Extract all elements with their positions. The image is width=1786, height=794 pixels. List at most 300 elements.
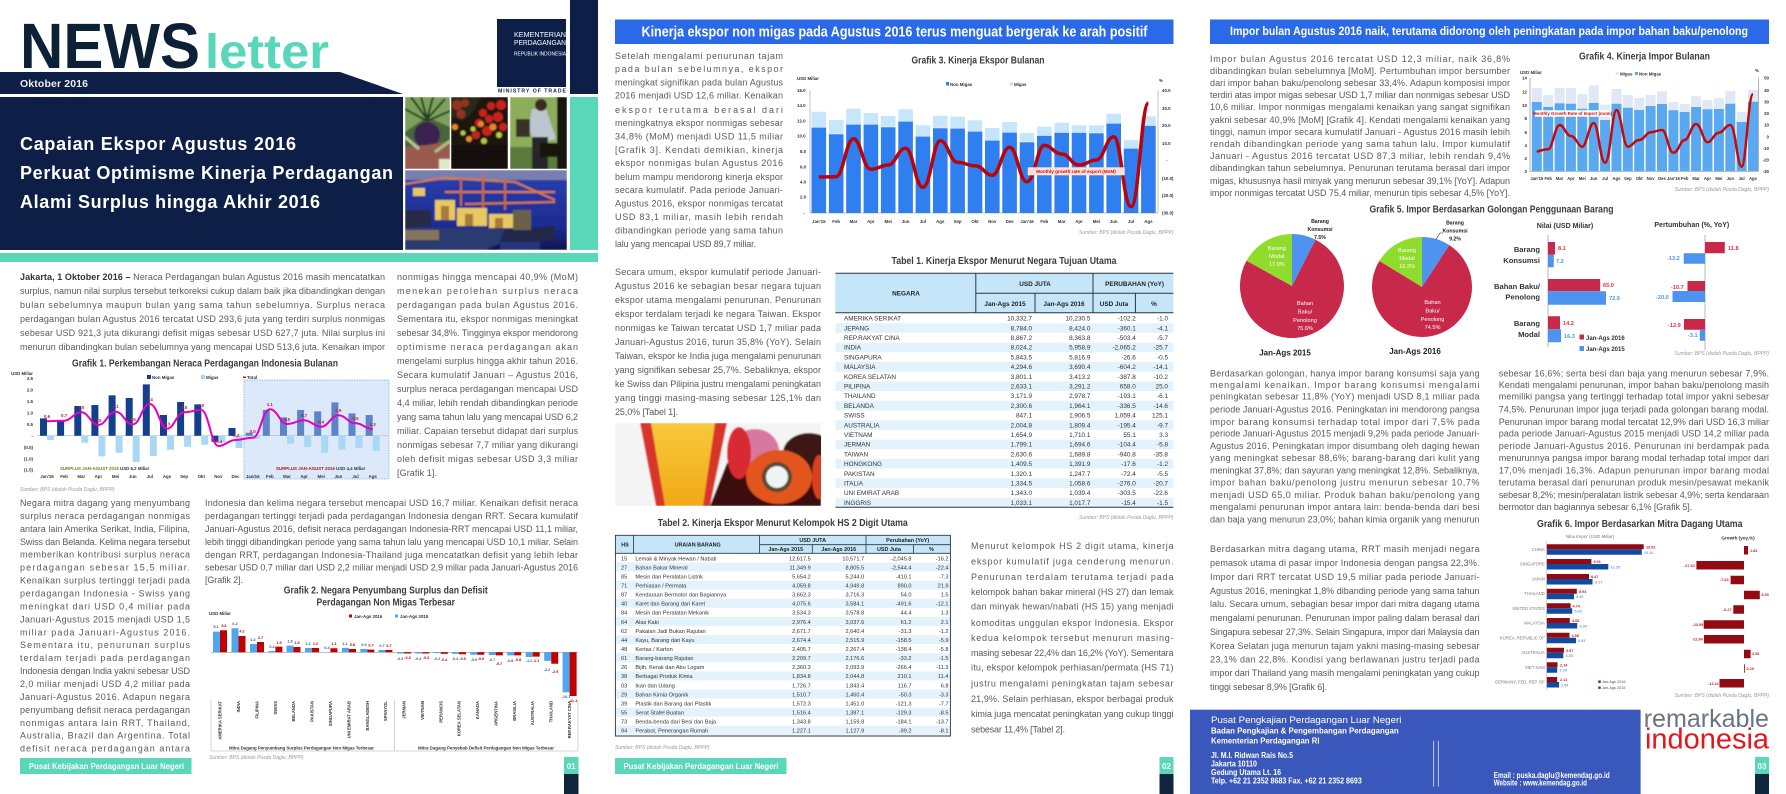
chart 1 axis labels: - (32, 433, 34, 438)
chart 6 value labels: 19.52 (1646, 546, 1656, 550)
chart 1: trade balance (11, 358, 389, 493)
table 2 values: 3,534.3 (792, 611, 811, 617)
chart 3 left axis: 14.0 (797, 103, 806, 108)
table 1 country names: JEPANG (844, 325, 869, 332)
intro text, column 2: nonmigas sebesar 7,7 miliar yang dikurangi (397, 440, 578, 450)
chart 2: surplus and deficit partners (209, 584, 578, 761)
table 2 HS codes and names: 15 (621, 556, 627, 562)
table 2 values: 6.8 (941, 683, 948, 689)
chart 2 value labels: -0.3 (415, 657, 421, 661)
chart 6 growth labels: 0.29 (1746, 667, 1754, 671)
chart 4 right axis: 50 (1764, 76, 1770, 81)
chart 4 right axis: 10 (1764, 123, 1770, 128)
chart 2 country labels: INDIA (236, 701, 241, 712)
chart 1 title: Grafik 1. Perkembangan Neraca Perdagangan Indonesia Bulanan (72, 358, 338, 370)
chart 6 growth labels: 8.90 (1762, 593, 1769, 597)
chart 2 value labels 2016: 0.7 (368, 644, 374, 648)
table 2 HS codes and names (621, 556, 727, 735)
chart 6 country labels: MALAYSIA (1524, 620, 1545, 626)
table 2 values: 61.2 (901, 620, 912, 626)
table 2 HS codes and names: Alas Kaki (635, 620, 659, 626)
chart 4 left axis: 14 (1522, 76, 1528, 81)
chart 1 axis labels: 2.0 (27, 388, 34, 393)
ministry logo: REPUBLIK INDONESIA (514, 52, 567, 58)
export text column: meningkatnya ekspor nonmigas sebesar (615, 118, 783, 128)
contact panel: Telp. +62 21 2352 8683 Fax. +62 21 2352 8693 (1211, 777, 1362, 786)
contact panel: Email : puska.daglu@kemendag.go.id (1494, 771, 1610, 780)
table 2 values: 2,674.4 (792, 638, 811, 644)
HS group text column: itu, ekspor kelompok perhiasan/permata (HS 71) (971, 663, 1174, 673)
chart 3 left axis: 10.0 (797, 134, 806, 139)
chart 6 country labels (1495, 547, 1545, 684)
chart 1 axis labels: 0.5 (27, 422, 34, 427)
lower text, narrow column: Januari-Agustus 2015 menjadi USD 1,5 (20, 614, 190, 624)
table 1 values 2016: 1,247.7 (1069, 471, 1091, 478)
table 1 values 2016: 1,694.6 (1069, 442, 1091, 449)
table 2 HS codes and names: Benda-benda dari Besi dan Baja (635, 720, 717, 726)
table 2 title: Tabel 2. Kinerja Ekspor Menurut Kelompok HS 2 Digit Utama (658, 517, 908, 529)
table 2 values: 11,349.9 (789, 565, 811, 571)
table 2 values: 4,949.8 (846, 584, 864, 590)
table 1 change in USD: -276.0 (1118, 480, 1136, 488)
table 2 values: 1,460.4 (846, 692, 864, 698)
chart 2 source: Sumber: BPS (diolah Pusda Daglu, BPPP) (209, 755, 304, 761)
table 1 change in USD: -17.6 (1121, 461, 1136, 468)
chart 2 value labels 2016: -0.6 (478, 657, 484, 661)
table 1 values 2015: 1,654.9 (1011, 432, 1032, 439)
chart 2 value labels: -0.4 (452, 657, 459, 661)
table 1 values 2016: 1,964.1 (1069, 403, 1091, 410)
import text column (1210, 54, 1510, 198)
chart 6 value labels: 4.58 (1572, 634, 1579, 638)
masthead: newsletter logotype (20, 10, 329, 82)
page 2 footer label: Pusat Kebijakan Perdagangan Luar Negeri (624, 762, 778, 771)
table 2 HS codes and names: Kayu, Barang dari Kayu (635, 638, 694, 644)
table 1 header: % (1151, 301, 1157, 308)
contact panel (1190, 710, 1641, 794)
chart 6 country labels: AUSTRALIA (1522, 650, 1545, 655)
bar chart: import value: Penolong (1505, 292, 1540, 302)
chart 6 country labels: SINGAPORE (1520, 562, 1545, 566)
export text column: ekspor terutama berasal dari (615, 105, 783, 115)
lower text, wide column: dengan RRT, perdagangan Indonesia-Thailand juga mencatatkan defisit yang lebih lebar (205, 550, 578, 560)
intro text, column 1: bulan sebelumnya maupun bulan yang sama tahun sebelumnya. Surplus neraca (20, 300, 385, 310)
chart 1 axis labels: 1.0 (27, 411, 34, 416)
chart 6 growth bars (1696, 546, 1760, 688)
table 2 HS codes and names: 55 (621, 710, 627, 716)
chart 6 country labels: GERMANY, FED. REP. OF (1495, 680, 1545, 684)
chart 5 source: Sumber: BPS (diolah Pusda Daglu, BPPP) (1674, 351, 1769, 357)
chart 6 country labels: UNITED STATES (1512, 606, 1545, 611)
intro text, column 1 (20, 272, 386, 352)
chart 2 value labels 2016: -11.1 (569, 699, 577, 703)
chart 1 axis labels: 2.5 (27, 376, 34, 381)
chart 5: imports by use (1240, 204, 1769, 358)
chart 4 right axis: 40 (1764, 88, 1770, 93)
table 2 values: 116.7 (898, 683, 912, 689)
chart 2 country labels: AMERIKA SERIKAT (218, 701, 222, 740)
chart 1 month labels: Apr (95, 474, 102, 479)
chart 2 country labels: SINGAPURA (328, 701, 333, 726)
chart 1 axis labels: 1.5 (27, 399, 34, 404)
chart 6 value labels 2015 (1560, 551, 1654, 688)
chart 4 month labels: Mei (1715, 176, 1722, 181)
chart 6 legend: Jan-Ags 2016 (1602, 680, 1625, 684)
export text column: [Grafik 3]. Kendati demikian, kinerja (615, 145, 783, 155)
intro text, column 2: [Grafik 1]. (397, 468, 437, 478)
table 2 values: 2,405.7 (792, 647, 811, 653)
table 2 values: 11.4 (938, 674, 948, 680)
table 2 values: -13.7 (936, 720, 948, 726)
chart 3 month labels: Okt (971, 219, 979, 224)
lower text, wide column: lebih tinggi dibandingkan periode yang sama tahun lalu yang mencapai USD 10,1 miliar. Selain (205, 537, 578, 547)
chart 4 month labels: Feb (1681, 176, 1689, 181)
table 2 values: 4,059.8 (792, 584, 811, 590)
chart 3 month labels: Mei (1093, 219, 1100, 224)
pie chart: Jan-Ags 2016: Bahan (1424, 300, 1441, 306)
intro text, column 1: sebesar USD 921,3 juta dikurangi defisit migas sebesar USD 627,7 juta. Nilai surplus ini (20, 328, 385, 338)
chart 2 unit and legend: USD Miliar (209, 611, 231, 616)
table 2 HS codes and names: Perhiasan / Permata (635, 584, 687, 590)
table 2 HS codes and names: 71 (621, 584, 627, 590)
import text column: terdiri atas impor migas sebesar USD 1,7 miliar dan nonmigas sebesar USD (1210, 90, 1510, 100)
chart 6 value labels: 4.65 (1572, 619, 1579, 623)
chart 6 growth labels: -23.09 (1692, 623, 1703, 627)
chart 6 growth labels: -7.64 (1720, 578, 1730, 582)
chart 3 month labels: Feb (832, 219, 840, 224)
table 2 values: 2,671.7 (792, 629, 811, 635)
table 1 change in USD: 658.0 (1120, 384, 1136, 390)
export text column: Agustus 2016, ekspor nonmigas tercatat (615, 199, 783, 209)
chart 2 country labels: ARGENTINA (494, 701, 498, 726)
chart 2 value labels: -0.8 (507, 659, 513, 663)
table 2 values: 1.3 (941, 611, 948, 617)
table 2 HS codes and names: Pakaian Jadi Bukan Rajutan (635, 629, 706, 635)
chart 1 value labels: 1.0 (78, 405, 85, 410)
chart 3 month labels: Jan'15 (812, 219, 826, 224)
chart 4 month labels: Mar (1556, 176, 1564, 181)
chart 1 value labels: 0.3 (164, 422, 171, 426)
table 1 change in percent: -6.1 (1157, 393, 1168, 400)
table 1 values 2016: 3,291.2 (1069, 384, 1091, 390)
table 1 values 2015: 2,004.8 (1011, 422, 1032, 429)
intro text, column 2: nonmigas hingga mencapai 40,9% (MoM) (397, 272, 578, 282)
chart 3 left axis (797, 88, 807, 216)
table 2 values: -7.7 (939, 701, 948, 707)
bar chart: import value: 8.1 (1558, 246, 1566, 252)
bar chart: import growth (1654, 222, 1739, 350)
chart 4 right axis: -20 (1763, 158, 1770, 163)
table 2 values: -99.2 (899, 729, 912, 735)
chart 6 growth labels: -27.32 (1684, 564, 1695, 568)
chart 2 value labels: 2.2 (250, 638, 256, 642)
chart 3 month labels: Jan'16 (1020, 219, 1034, 224)
chart 1 month labels: Okt (198, 474, 205, 479)
chart 3 month labels: Nov (988, 219, 997, 224)
table 1 country names: AMERIKA SERIKAT (844, 316, 901, 323)
chart 2 country labels: BANGLADESH (365, 701, 370, 731)
table 1 values 2015: 8,024.2 (1011, 345, 1032, 352)
remarkable indonesia logo: remarkable (1644, 705, 1769, 733)
contact panel: Jl. M.I. Ridwan Rais No.5 (1211, 751, 1293, 760)
chart 6 value labels: 9.01 (1594, 560, 1601, 564)
table 2 values: 1,572.3 (792, 701, 811, 707)
table 1 change in percent: -5.5 (1157, 471, 1168, 478)
chart 2 country labels: KOREA SELATAN (456, 701, 462, 736)
chart 3 right axis: 20.0 (1162, 123, 1171, 128)
bar chart: import growth: -20.0 (1656, 295, 1669, 301)
table 2 values: 44.4 (901, 611, 912, 617)
contact panel: Kementerian Perdagangan RI (1211, 737, 1320, 746)
partner text column: lalu. Secara umum, sebagian besar impor dari mitra dagang utama (1210, 599, 1480, 609)
table 1 country names: INDIA (844, 345, 862, 352)
table 2 values: -158.5 (896, 638, 912, 644)
table 2 values: 2,360.3 (792, 665, 811, 671)
chart 1 highlighted 2016 panel (244, 380, 389, 479)
HS group text column: masing sebesar 22,4% dan 16,2% (YoY). Sementara (971, 648, 1174, 658)
intro text, column 2: mengelami surplus hingga akhir tahun 2016. (397, 356, 578, 366)
table 2 values: -121.3 (896, 701, 912, 707)
export text column (615, 51, 784, 249)
export text column: Setelah mengalami penurunan tajam (615, 51, 783, 61)
lower text, narrow column: meningkat dari USD 0,4 miliar pada (20, 601, 190, 611)
bar chart: import value: Konsumsi (1503, 256, 1540, 265)
table 2 header: Perubahan (YoY) (886, 538, 929, 544)
table 2 values: 3,662.3 (792, 593, 811, 599)
lower text, narrow column: surplus neraca perdagangan nonmigas (20, 511, 190, 521)
table 1 values 2016: 1,039.4 (1069, 490, 1091, 497)
table 1 change in USD: -360.1 (1118, 325, 1136, 332)
table 2 values: 8,805.5 (846, 565, 864, 571)
table 2 values: -31.3 (899, 629, 912, 635)
headline panel: Alami Surplus hingga Akhir 2016 (20, 192, 320, 212)
export destination text: Agustus 2016 ke sebagian besar negara tujuan (615, 281, 821, 291)
chart 6 growth labels: -22.84 (1692, 638, 1704, 642)
table 2 values: -8.1 (939, 729, 948, 735)
table 1 change in percent: 3.3 (1159, 432, 1168, 439)
chart 4 left axis: 4 (1525, 143, 1528, 148)
bar chart: import value: Barang (1514, 245, 1540, 254)
chart 1 month labels: Mei (318, 474, 325, 479)
chart 1 axis labels (11, 371, 34, 473)
chart 2 value labels: 1.1 (342, 642, 348, 646)
table 1 change in percent: 125.1 (1152, 413, 1168, 420)
page 2 banner: Kinerja ekspor non migas pada Agustus 2016 terus menguat bergerak ke arah positif (642, 24, 1148, 40)
chart 4 month labels: Des (1658, 176, 1667, 181)
chart 6 value labels 2015: 9.17 (1595, 580, 1602, 584)
table 2 values: 2,515.9 (846, 638, 864, 644)
import category text, column 1: periode Januari-Agustus 2015 menjadi 9,2% pada periode Januari- (1210, 429, 1480, 439)
photo: coffee cherries (451, 97, 508, 169)
chart 1 value labels: 1.4 (147, 397, 153, 402)
chart 2 value labels: 6.2 (232, 622, 238, 626)
chart 2 country labels: REP.RAKYAT CINA (567, 701, 572, 738)
chart 4 growth line (1537, 94, 1753, 167)
contact panel: Jakarta 10110 (1211, 759, 1257, 768)
photo: oil palm (405, 97, 450, 169)
chart 6 value labels 2015: 5.45 (1576, 595, 1583, 599)
chart 1 value labels: 1.0 (198, 403, 205, 408)
table 2 values: -266.4 (896, 665, 912, 671)
chart 6 value labels 2015: 2.09 (1560, 668, 1567, 672)
teal divider band (0, 253, 598, 262)
table 1 header: USD Juta (1100, 301, 1129, 308)
chart 4 month labels: Feb (1544, 176, 1552, 181)
chart 2 value labels (213, 622, 570, 699)
chart 1 value labels: 0.4 (318, 420, 325, 424)
chart 4 month labels: Okt (1636, 176, 1643, 181)
table 1 country names: THAILAND (844, 393, 876, 400)
chart 4 month labels (1530, 176, 1758, 181)
table 2 values: 1,451.0 (846, 701, 864, 707)
chart 2 value labels 2016: -0.8 (515, 658, 521, 662)
chart 4 month labels: Jun (1727, 176, 1734, 181)
chart 1 legend: Non Migas (152, 375, 175, 380)
chart 4 source: Sumber: BPS (diolah Pusda Daglu, BPPP) (1674, 187, 1769, 193)
chart 6 country labels: THAILAND (1524, 591, 1545, 596)
chart 6 country labels: CHINA (1532, 547, 1545, 552)
chart 4: monthly imports (1520, 50, 1770, 193)
table 2: exports by HS group (615, 517, 950, 751)
import text column: tinggi, namun impor secara kumulatif Januari - Agustus 2016 masih lebih (1210, 127, 1510, 137)
chart 2 value labels 2016: -2.9 (552, 670, 558, 674)
table 2 values: 2,176.6 (846, 656, 864, 662)
chart 2 value labels 2016: 4.2 (239, 630, 245, 634)
chart 3 left axis: 8.0 (800, 149, 807, 154)
table 2 HS codes and names: Plastik dan Barang dari Plastik (635, 701, 711, 707)
chart 1 month labels (40, 474, 377, 479)
chart 1 month labels: Mei (112, 474, 119, 479)
table 2 header: USD Juta (877, 547, 902, 553)
table 1 values 2015: 8,867.2 (1011, 335, 1032, 342)
import category text, column 1: periode Januari-Agustus 2016. Peningkatan ini mendorong pangsa (1210, 405, 1480, 415)
intro text, column 2: Sementara itu, ekspor nonmigas meningkat (397, 314, 578, 324)
pie chart: Jan-Ags 2016: Barang (1398, 248, 1416, 254)
chart 1 total line (47, 404, 373, 446)
chart 6 country labels: KOREA, REPUBLIC OF (1500, 636, 1545, 640)
table 2 header: URAIAN BARANG (675, 543, 721, 549)
table 1 change in USD: 1,059.4 (1114, 413, 1136, 420)
bar chart: import value: 72.9 (1609, 296, 1620, 302)
import category text, column 1: Berdasarkan golongan, hanya impor barang konsumsi saja yang (1210, 368, 1480, 378)
chart 1 month labels: Feb (60, 474, 68, 479)
chart 1 month labels: Mar (77, 474, 85, 479)
export destination text: Januari-Agustus 2016, turun 35,8% (YoY). Selain (615, 337, 821, 347)
import text column: impor nonmigas tercatat USD 75,4 miliar, menurun tipis sebesar 4,5% [YoY]. (1210, 188, 1510, 198)
table 2 HS codes and names: 84 (621, 611, 627, 617)
chart 5 title: Grafik 5. Impor Berdasarkan Golongan Penggunaan Barang (1370, 204, 1614, 216)
chart 6 value labels: 2.14 (1560, 664, 1568, 668)
chart 6 growth labels (1684, 549, 1769, 686)
bar chart: import growth: -12.9 (1668, 323, 1681, 329)
pie chart: Jan-Ags 2016: Baku/ (1425, 308, 1440, 314)
chart 6: imports by partner (1495, 518, 1769, 699)
bar chart: import value: 65.0 (1603, 283, 1614, 289)
chart 6 legend (1598, 680, 1625, 690)
decorative side strips (570, 0, 598, 250)
intro text, column 1: menurun dibandingkan bulan sebelumnya yang mencapai USD 513,6 juta. Kenaikan impor (20, 342, 385, 352)
table 1 change in percent: -1.0 (1157, 316, 1168, 323)
import category text, column 1: menjadi USD 65,0 miliar. Produk bahan baku/penolong yang (1210, 490, 1480, 500)
contact panel: Badan Pengkajian & Pengembangan Perdagangan (1211, 726, 1399, 735)
HS group text column: Menurut kelompok HS 2 digit utama, kinerja (971, 541, 1174, 551)
import category text, column 1: impor bahan baku/penolong justru menurun sebesar 10,7% (1210, 478, 1480, 488)
intro text, column 2: perdagangan pada bulan Agustus 2016. (397, 300, 578, 310)
pie chart: Jan-Ags 2016: Jan-Ags 2016 (1389, 347, 1441, 356)
table 1 change in USD: 55.1 (1123, 432, 1136, 439)
table 2 values: -3.3 (939, 692, 948, 698)
chart 2 group captions: Mitra Dagang Penyebab Defisit Perdagangan Non Migas Terbesar (418, 746, 554, 750)
HS group text column: kedua kelompok tersebut menurun masing- (971, 633, 1174, 643)
export text column: ekspor nonmigas bulan Agustus 2016 (615, 158, 783, 168)
pie chart: Jan-Ags 2016: 16.3% (1399, 264, 1415, 270)
intro text, column 2: surplus neraca perdagangan mencapai USD (397, 384, 578, 394)
table 1 header: Jan-Ags 2016 (1043, 301, 1085, 308)
import category text, column 2: Kendati mengalami penurunan, impor bahan baku/penolong masih (1499, 380, 1769, 390)
import category text, column 2: periode Januari-Agustus 2016. Penurunan ini berdampak pada (1499, 441, 1769, 451)
chart 3 month labels: Ags (936, 219, 945, 224)
table 1 values 2015: 1,799.1 (1011, 442, 1032, 449)
chart 6 value labels 2015: 12.35 (1610, 566, 1620, 570)
table 1 header (835, 273, 1173, 313)
table 1 change in USD: -15.4 (1121, 500, 1136, 507)
export text column: secara kumulatif. Pada periode Januari- (615, 185, 783, 195)
chart 6 country labels: JAPAN (1532, 576, 1545, 582)
export text column: 2016 menjadi USD 12,6 miliar. Kenaikan (615, 91, 783, 101)
HS group text column: kimia juga mencatat peningkatan yang cukup tinggi (971, 709, 1174, 719)
lower text, wide column (205, 498, 578, 585)
chart 4 non-migas bars (1532, 102, 1758, 171)
table 1 values 2015: 847.1 (1016, 413, 1032, 420)
table 1 country names: PAKISTAN (844, 471, 875, 478)
chart 3 right axis: (30.0) (1162, 211, 1174, 216)
chart 2 value labels 2016: -0.5 (459, 657, 466, 661)
page 2 banner (615, 20, 1174, 44)
pie chart: Jan-Ags 2016: Modal (1399, 256, 1415, 262)
chart 2 country labels (218, 700, 572, 740)
table 1 change in USD: -193.1 (1118, 393, 1136, 400)
pie chart: Jan-Ags 2015: Jan-Ags 2015 (1259, 348, 1311, 358)
table 1 values 2015: 1,343.0 (1011, 490, 1032, 497)
chart 4 unit and legend: USD Miliar (1520, 70, 1542, 75)
chart 3 non-migas bars (812, 122, 1156, 213)
table 1 country names: KOREA SELATAN (844, 374, 896, 381)
chart 2 value labels 2016: -1.1 (533, 659, 539, 663)
chart 2 value labels: -10.1 (562, 695, 570, 699)
HS group text column (970, 541, 1174, 735)
table 1 country names: TAIWAN (844, 451, 869, 458)
chart 1 axis labels: USD Miliar (11, 371, 33, 376)
chart 3 right axis: (20.0) (1162, 193, 1174, 198)
contact panel: Website : www.kemendag.go.id (1494, 779, 1587, 788)
table 1 header: PERUBAHAN (YoY) (1105, 281, 1164, 288)
chart 4 unit and legend: Migas (1620, 72, 1633, 76)
chart 3 month labels: Mar (1058, 219, 1066, 224)
chart 1 value labels: 0.0 (250, 429, 256, 434)
table 2 HS codes and names: Barang-barang Rajutan (635, 656, 694, 662)
export destination text: ke Swiss dan Pilipina justru mengalami peningkatan (615, 379, 821, 389)
chart 1 value labels: 0.5 (352, 416, 359, 421)
chart 2 value labels 2016: 1.5 (276, 641, 282, 645)
table 1 change in USD: -104.4 (1118, 442, 1136, 449)
import text column: dari impor bahan baku/penolong sebesar 33,4%. Adapun komposisi impor (1210, 78, 1510, 88)
table 1 values 2016: 1,391.9 (1069, 461, 1091, 468)
table 1 values 2015: 1,409.5 (1011, 461, 1032, 468)
bar chart legend (1580, 334, 1625, 353)
chart 1 value labels (44, 397, 376, 444)
lower text, narrow column: memberikan kontribusi surplus neraca (20, 550, 190, 560)
chart 2 country labels: UNI EMIRAT ARAB (346, 701, 352, 738)
